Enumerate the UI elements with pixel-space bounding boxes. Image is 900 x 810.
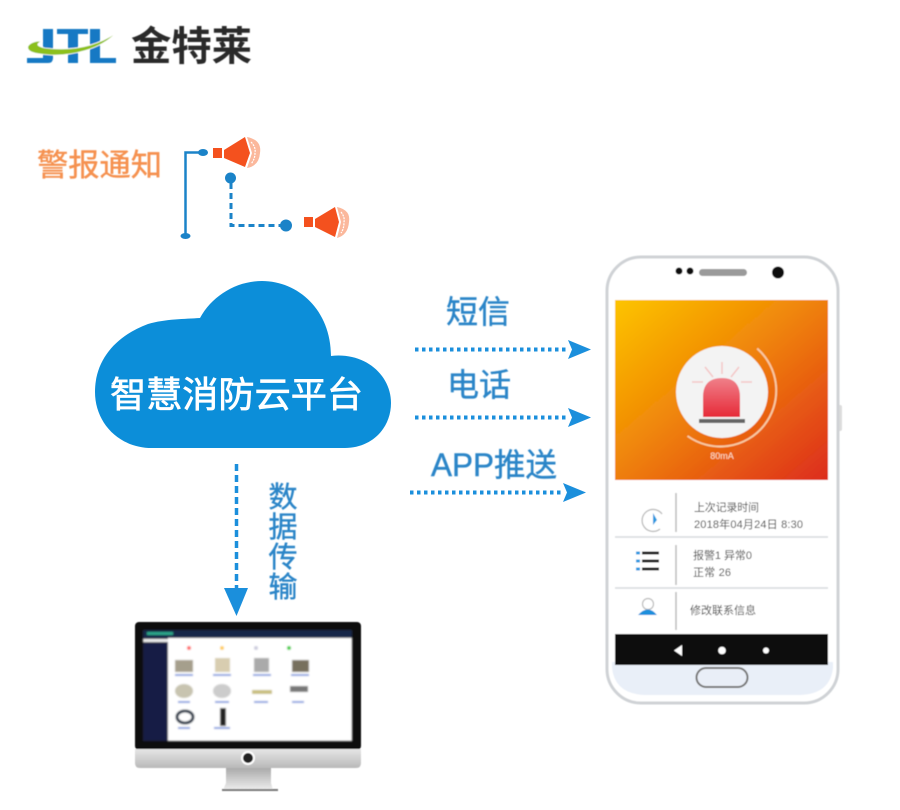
cloud platform bbox=[95, 281, 391, 448]
monitor stand bbox=[223, 768, 273, 790]
row text: status bbox=[693, 548, 752, 579]
row text: last record: 上次记录时间 bbox=[694, 500, 759, 514]
phone screen: info rows bbox=[615, 480, 828, 634]
label: APP push: APP推送 bbox=[431, 447, 557, 483]
logo text: 金特莱 bbox=[131, 25, 252, 69]
phone side button bbox=[838, 405, 842, 431]
label: data transfer bbox=[268, 481, 298, 604]
label: data transfer: 输 bbox=[268, 571, 298, 604]
icon: contact bbox=[638, 598, 657, 615]
desktop monitor bbox=[135, 622, 361, 791]
row text: edit contact: 修改联系信息 bbox=[690, 603, 756, 617]
label: data transfer: 数 bbox=[268, 481, 298, 514]
arrow: phone call bbox=[415, 408, 591, 427]
row text: last record: 2018年04月24日 8:30 bbox=[694, 517, 803, 531]
row text: status: 报警1 异常0 bbox=[693, 548, 752, 562]
connector: dashed line bbox=[225, 172, 292, 232]
icon: list bbox=[636, 553, 659, 569]
monitor screen bbox=[143, 630, 352, 741]
heading: alarm notification: 警报通知 bbox=[37, 148, 162, 183]
logo mark bbox=[27, 29, 116, 63]
alarm dial bbox=[676, 346, 768, 438]
phone nav bar bbox=[615, 634, 828, 665]
monitor bezel bbox=[135, 622, 361, 750]
label: phone call: 电话 bbox=[447, 367, 511, 403]
phone body bbox=[607, 257, 838, 703]
cloud label: 智慧消防云平台 bbox=[110, 374, 363, 415]
monitor logo bbox=[241, 751, 255, 765]
arrow: SMS bbox=[415, 340, 591, 359]
current reading: 80mA bbox=[710, 451, 734, 461]
label: data transfer: 传 bbox=[268, 541, 298, 574]
phone earpiece and camera bbox=[676, 266, 784, 278]
icon: clock bbox=[642, 509, 662, 531]
phone screen: alarm panel bbox=[615, 300, 828, 480]
arrow: data transfer bbox=[224, 464, 248, 616]
row text: status: 正常 26 bbox=[693, 566, 731, 579]
connector: solid line bbox=[180, 149, 208, 239]
cloud shape bbox=[95, 281, 391, 448]
label: SMS: 短信 bbox=[446, 294, 510, 330]
phone lower bezel tint bbox=[612, 662, 833, 695]
icon: speaker 2 bbox=[304, 207, 349, 238]
icon: speaker 1 bbox=[213, 137, 260, 168]
monitor chin bbox=[135, 749, 361, 768]
label: data transfer: 据 bbox=[268, 511, 298, 544]
row text: last record bbox=[694, 500, 803, 531]
siren icon bbox=[692, 362, 752, 423]
home button bbox=[696, 668, 748, 687]
arrow: APP push bbox=[410, 483, 586, 502]
smartphone bbox=[607, 257, 842, 703]
logo: JTL 金特莱 bbox=[27, 25, 252, 69]
